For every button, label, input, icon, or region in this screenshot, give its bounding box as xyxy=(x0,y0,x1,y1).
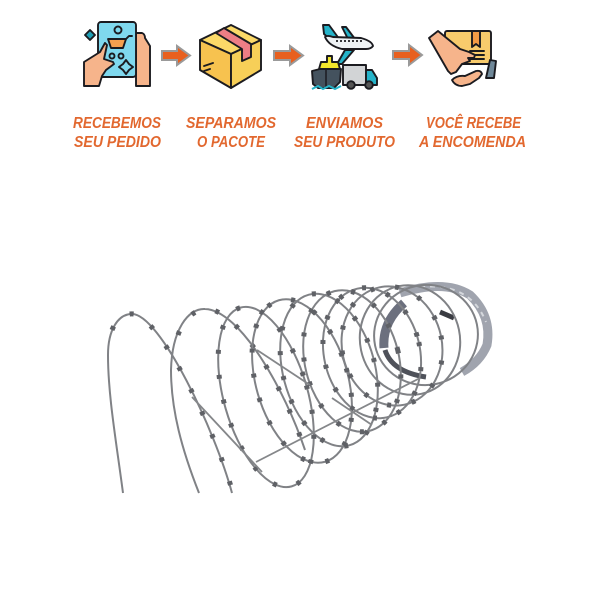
icon: hands receiving package xyxy=(429,31,496,86)
barbs on rings xyxy=(200,277,453,498)
caption 4: A ENCOMENDA xyxy=(418,134,526,151)
caption 2: SEPARAMOS xyxy=(186,115,277,132)
icon: plane, ship and truck xyxy=(312,25,377,89)
ship xyxy=(312,56,341,89)
caption 4: VOCÊ RECEBE xyxy=(426,114,522,132)
caption 1: SEU PEDIDO xyxy=(74,134,161,151)
caption 2 xyxy=(186,115,277,151)
end of coil, tightly wound xyxy=(384,286,488,377)
icon: box xyxy=(200,25,261,88)
caption 4 xyxy=(418,114,526,151)
arrow 2 xyxy=(274,46,303,65)
caption 3: SEU PRODUTO xyxy=(294,134,395,151)
caption 2: O PACOTE xyxy=(197,134,266,151)
caption 3 xyxy=(294,115,395,151)
open loops xyxy=(108,314,232,493)
tilted rings xyxy=(200,275,487,498)
caption 3: ENVIAMOS xyxy=(306,115,384,132)
caption 1 xyxy=(73,115,162,151)
caption 1: RECEBEMOS xyxy=(73,115,162,132)
arrow 1 xyxy=(162,46,190,65)
arrow 3 xyxy=(393,45,422,65)
icon: phone order xyxy=(84,22,150,86)
razor wire coil xyxy=(108,275,488,498)
straight binding wires xyxy=(192,350,420,472)
plane xyxy=(323,25,373,64)
truck xyxy=(343,65,377,89)
